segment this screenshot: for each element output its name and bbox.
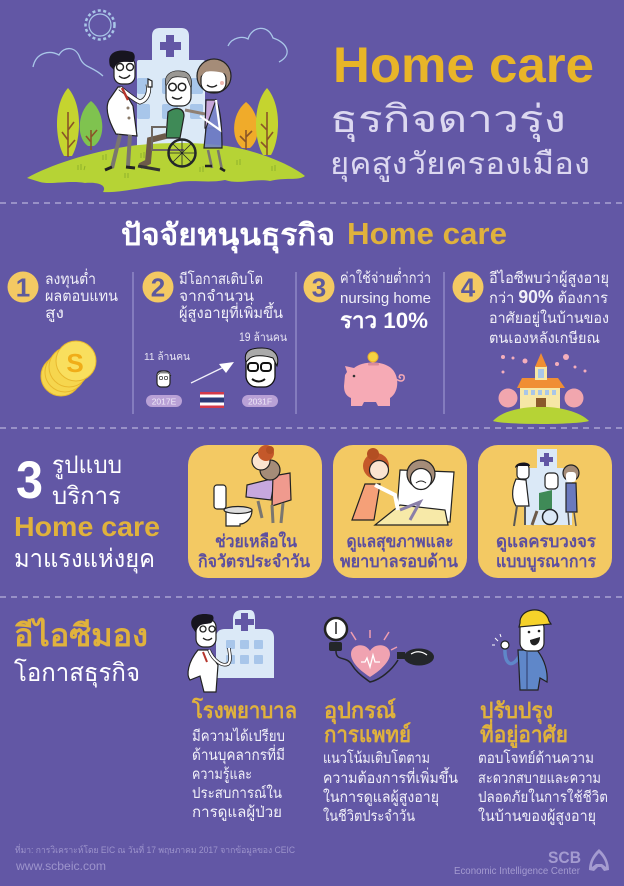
text: driver 4 [489,269,609,347]
number badge 1: 1 [16,272,30,302]
website: www.scbeic.com [15,859,106,873]
heading: three service models: มาแรงแห่งยุค [14,545,155,574]
icon: care team [513,449,579,526]
logo: SCB EIC: SCB [548,848,581,867]
heading: medical devices: การแพทย์ [324,722,411,747]
icon: large face [245,348,278,387]
card: health and nursing [333,445,467,578]
icon: house with trees [493,353,589,424]
icon: construction worker [492,610,551,690]
card text [496,532,597,573]
heading: medical devices [324,698,411,747]
text: medical devices: แนวโน้มเติบโตตาม [323,749,430,767]
title: ธุรกิจดาวรุ่ง [330,99,566,142]
text: hospitals: การดูแลผู้ป่วย [192,804,282,821]
heading: three service models [14,451,160,574]
icon: blood pressure monitor and heart [325,618,434,682]
panel: driver 4 [452,269,609,424]
panel: driver 2 [142,270,287,408]
number badge 4 [452,272,484,302]
text: driver 3: ราว 10% [340,308,428,333]
card text [198,531,310,571]
text: driver 4: กว่า 90% ต้องการ [489,287,608,307]
panel: home renovation [478,610,608,826]
text: home renovation [478,749,608,826]
text: driver 2: ผู้สูงอายุที่เพิ่มขึ้น [179,302,283,323]
number badge 4: 4 [461,272,476,302]
label 2031F [242,395,278,407]
heading: three service models: บริการ [52,483,121,510]
figure: wheelchair patient [138,71,205,170]
panel: medical devices [323,618,458,825]
text: driver 3 [340,267,431,333]
label 2017E [146,395,182,407]
text: hospitals: ด้านบุคลากรที่มี [192,744,285,765]
icon: hospital building [137,28,205,150]
grass tufts [78,152,275,178]
text: hospitals [192,727,285,821]
panel: driver 3 [304,267,431,406]
label 2031F: 2031F [248,396,272,406]
figure: grandmother carer [197,59,231,171]
text: hospitals: ความรู้และ [192,766,252,783]
source note: ที่มา: การวิเคราะห์โดย EIC ณ วันที่ 17 พฤษภาคม 2017 จากข้อมูลของ CEIC [15,843,295,856]
hero illustration: doctor, patient and carer on a hill [27,10,305,192]
text: home renovation: ตอบโจทย์ด้านความ [478,749,594,767]
icon: trees [57,88,278,157]
heading: hospitals: โรงพยาบาล [191,697,297,723]
text: hospitals: ประสบการณ์ใน [192,784,282,802]
number badge 2: 2 [151,272,165,302]
icon: carer helping at toilet [214,445,291,526]
number badge 3: 3 [312,272,326,302]
number badge 2 [142,272,174,302]
heading: home renovation: ที่อยู่อาศัย [480,718,568,749]
text: home renovation: ปลอดภัยในการใช้ชีวิต [478,788,608,806]
text: driver 1: ลงทุนต่ำ [45,268,96,289]
text: driver 2: มีโอกาสเติบโต [179,270,263,288]
heading: three service models: 3 [16,451,43,510]
card text: พยาบาลรอบด้าน [340,552,458,571]
text: medical devices: ในชีวิตประจำวัน [323,807,415,825]
logo: SCB EIC: Economic Intelligence Center [454,866,581,877]
text: driver 4: อาศัยอยู่ในบ้านของ [489,309,609,327]
card text: ช่วยเหลือใน [215,531,297,551]
heading: EIC view: อีไอซีมอง [14,617,148,653]
icon: clouds [33,28,287,76]
chart: elderly population growth: 19 ล้านคน [239,331,287,344]
arrow: growth [191,362,234,383]
heading: EIC view [14,617,148,688]
text: medical devices [323,749,458,825]
text: medical devices: ความต้องการที่เพิ่มขึ้น [323,767,458,787]
icon: doctor and hospital [188,610,274,692]
heading: EIC view: โอกาสธุรกิจ [14,658,140,688]
heading: three service models: รูปแบบ [52,452,122,480]
panel: hospitals [188,610,297,821]
text: home renovation: ในบ้านของผู้สูงอายุ [478,807,596,826]
icon: Thai flag [200,392,224,408]
title: Home care [333,37,594,93]
heading: business drivers: ปัจจัยหนุนธุรกิจ [121,219,335,254]
text: driver 1: สูง [45,305,64,322]
heading: home renovation: ปรับปรุง [480,698,553,725]
title: ยุคสูงวัยครองเมือง [330,148,590,183]
icon: gold coins: S [66,348,84,378]
card: integrated care [478,445,612,578]
label 2017E: 2017E [152,396,177,406]
icon: small face [157,371,171,387]
figure: doctor [105,51,152,170]
text: hospitals: มีความได้เปรียบ [192,727,285,745]
heading: home renovation [480,698,568,749]
text: driver 2: จากจำนวน [179,288,254,305]
text: driver 4: ตนเองหลังเกษียณ [489,330,600,347]
text: driver 2 [179,270,283,323]
card text: ดูแลสุขภาพและ [346,532,454,553]
text: driver 1 [45,268,118,322]
title [330,37,594,183]
card text: แบบบูรณาการ [496,552,597,573]
panel: driver 1 [8,268,118,396]
text: home renovation: สะดวกสบายและความ [478,770,601,787]
heading: business drivers: Home care [347,216,507,251]
text: driver 3: ค่าใช้จ่ายต่ำกว่า [340,267,431,287]
card text: กิจวัตรประจำวัน [198,552,310,571]
text: driver 3: nursing home [340,290,431,307]
icon: piggy bank [344,352,404,406]
chart: elderly population growth [144,331,287,408]
icon: green hill [27,143,305,192]
card text [340,532,458,571]
heading: three service models: Home care [14,511,160,542]
card text: ดูแลครบวงจร [496,532,597,553]
text: medical devices: ในการดูแลผู้สูงอายุ [323,788,439,807]
chart: elderly population growth: 11 ล้านคน [144,351,190,363]
logo: SCB EIC [454,848,609,877]
card: daily routine help [188,445,322,578]
text: driver 4: อีไอซีพบว่าผู้สูงอายุ [489,269,609,288]
icon: nurse and bedridden patient [352,448,454,525]
heading: business drivers [121,216,507,254]
text: driver 1: ผลตอบแทน [45,288,118,305]
icon: sun [86,10,114,40]
heading: medical devices: อุปกรณ์ [324,698,396,725]
